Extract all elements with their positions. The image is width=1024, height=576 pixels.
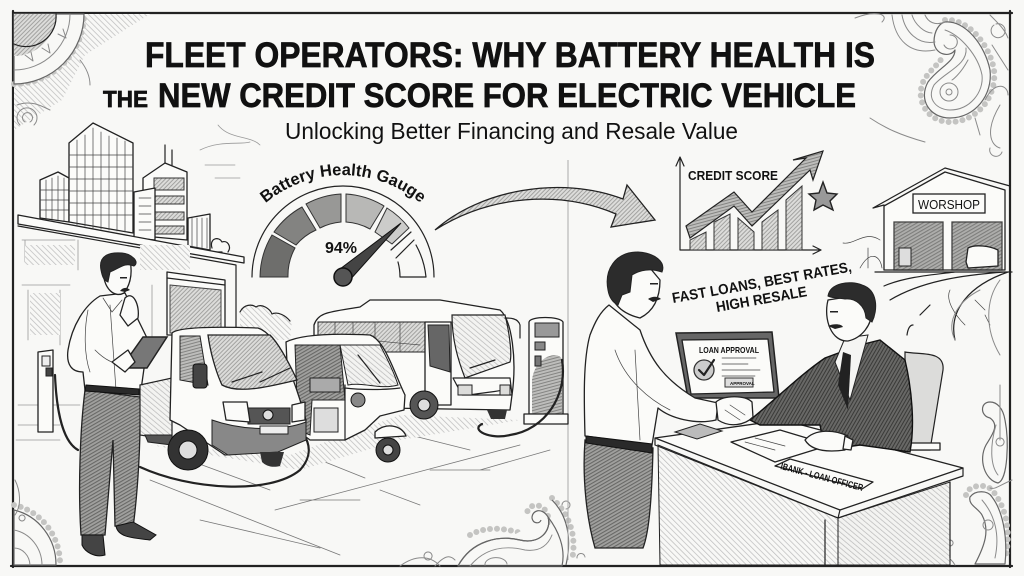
- shirt: [584, 305, 718, 445]
- paisley: bottom center: [400, 498, 574, 566]
- left charging station: [38, 350, 78, 450]
- callout: benefits: FAST LOANS, BEST RATES,: [671, 260, 853, 307]
- hand on chin: [120, 296, 138, 326]
- title: NEW CREDIT SCORE FOR ELECTRIC VEHICLE: [158, 77, 856, 115]
- swirls: [562, 118, 1000, 558]
- loan approval monitor: APPROVAL: [730, 381, 755, 386]
- right charging station and cable: [478, 318, 568, 436]
- man with tablet: [68, 253, 167, 556]
- charging cable: truck: [140, 425, 309, 487]
- electric truck: [140, 327, 306, 470]
- belt: [85, 385, 139, 395]
- paisley: bottom right: [910, 480, 1012, 565]
- trousers: [584, 440, 653, 548]
- shirt: [68, 293, 148, 397]
- name plate: IBANK - LOAN OFFICER: [779, 461, 864, 494]
- gauge needle: [336, 223, 401, 282]
- callout: benefits: HIGH RESALE: [715, 284, 809, 316]
- paisley: top right: [855, 14, 1008, 156]
- battery health gauge: [251, 164, 435, 287]
- chart bars: [690, 186, 802, 250]
- auto rickshaw: [286, 334, 406, 462]
- head: [610, 262, 660, 318]
- gauge value: 94%: [325, 240, 357, 257]
- title: THE: [103, 86, 148, 112]
- shirt and tie: [835, 335, 868, 400]
- fleet operator shaking hands: [584, 252, 753, 548]
- title: [103, 36, 875, 115]
- title: FLEET OPERATORS: WHY BATTERY HEALTH IS: [145, 36, 875, 75]
- name plate: [775, 459, 873, 494]
- belt: [586, 436, 652, 453]
- city skyline: [40, 123, 260, 252]
- chart label: CREDIT SCORE: [688, 168, 778, 183]
- hand on desk: [805, 431, 848, 451]
- workshop: WORSHOP: [918, 198, 980, 212]
- star: [809, 182, 837, 210]
- electric bus: [314, 300, 520, 419]
- rising arrow: [686, 151, 823, 238]
- depot building: [16, 215, 292, 440]
- trousers: [80, 390, 140, 535]
- head: [827, 295, 872, 341]
- ground shadow under vehicles: [150, 415, 520, 470]
- loan officer: [750, 283, 943, 452]
- handshake: [716, 397, 753, 425]
- desk: [655, 420, 963, 566]
- vertical scene divider: [567, 160, 569, 560]
- curved arrow to credit score: [435, 185, 655, 230]
- loan approval monitor: LOAN APPROVAL: [699, 345, 759, 355]
- paisley: right middle: [982, 402, 1007, 483]
- shoes: [82, 535, 105, 556]
- gauge label: [258, 175, 428, 210]
- workshop: [843, 168, 1012, 355]
- corner mandala: top left: [14, 14, 150, 130]
- mandala: bottom left: [14, 480, 60, 566]
- credit score chart: [676, 151, 837, 254]
- battery health gauge: Battery Health Gauge: [260, 164, 424, 202]
- loan approval monitor: [676, 332, 779, 398]
- tablet: [121, 337, 167, 368]
- parking bay lines: [150, 435, 550, 555]
- subtitle: Unlocking Better Financing and Resale Value: [285, 118, 738, 144]
- head: [103, 260, 131, 294]
- suit: [750, 340, 912, 452]
- chair: [905, 352, 943, 450]
- cuff: [843, 436, 853, 450]
